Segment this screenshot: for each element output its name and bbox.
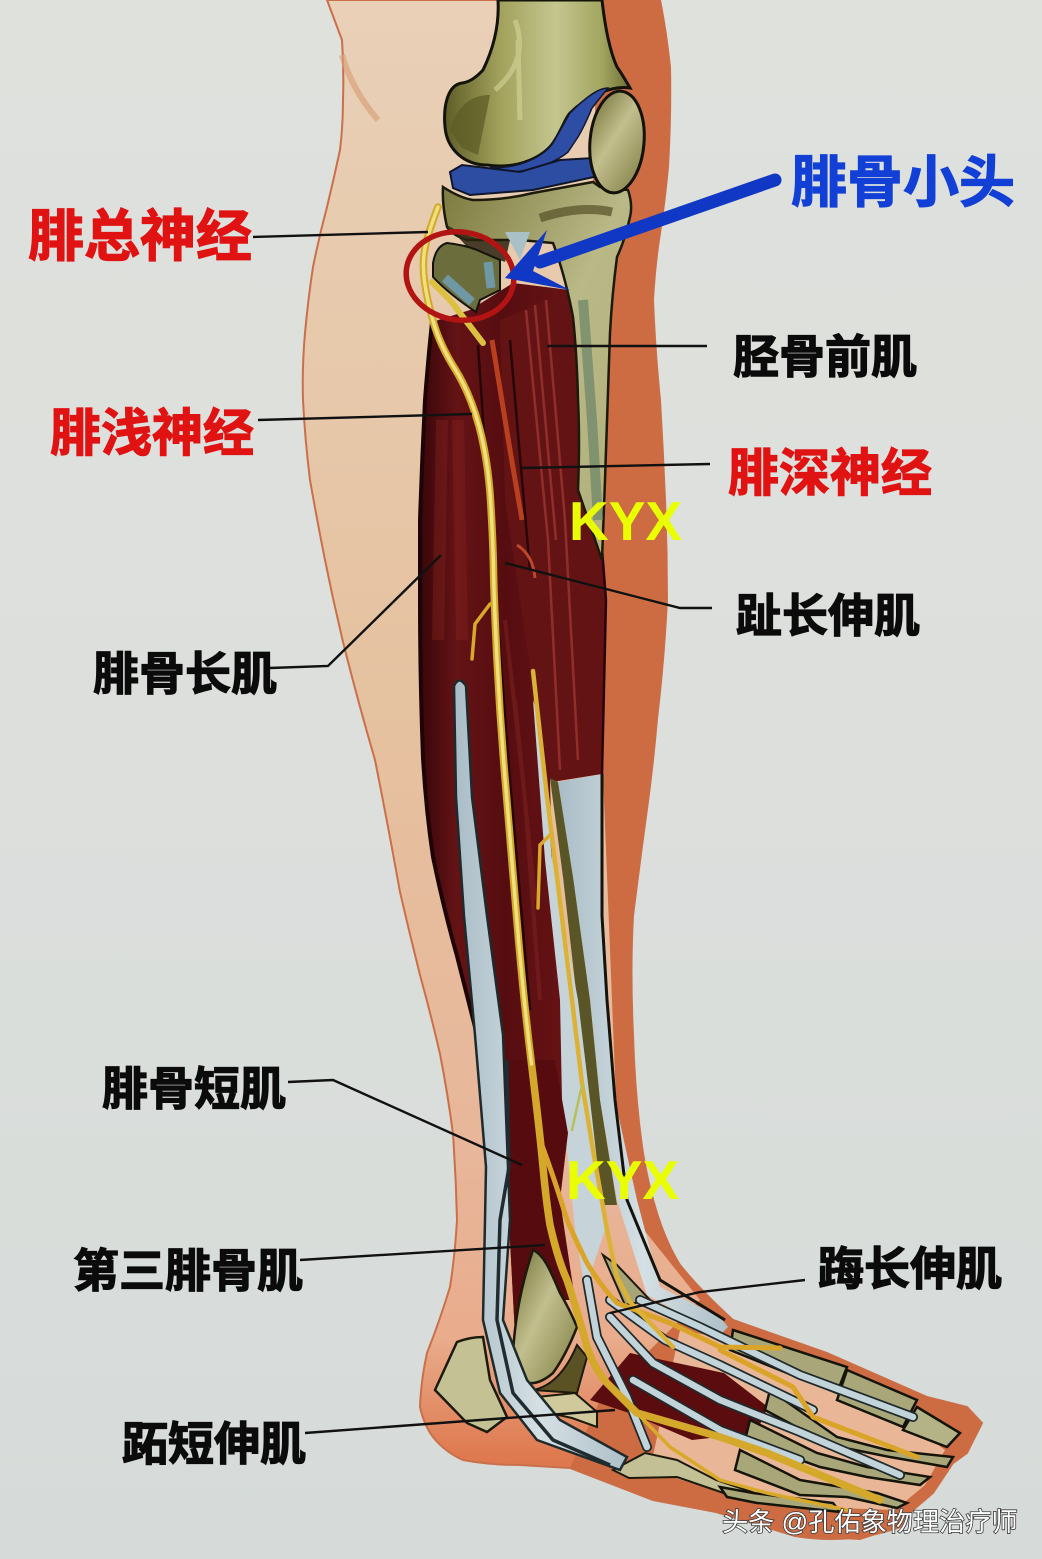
label: deep peroneal nerve: 腓深神经 <box>728 445 932 502</box>
superficial peroneal nerve <box>423 207 880 1500</box>
peroneal tendons <box>454 680 627 1470</box>
small green-yellow twig <box>572 1085 582 1130</box>
label: head of fibula: 腓骨小头 <box>791 151 1015 214</box>
foot muscle: extensor brevis <box>590 1353 768 1440</box>
calcaneus bone <box>435 1337 507 1432</box>
tibia shaft and head <box>443 182 631 560</box>
fibular head <box>433 243 500 312</box>
blue femoral cartilage <box>490 88 608 172</box>
source credit: 头条 @孔佑象物理治疗师 <box>722 1507 1018 1537</box>
muscle: peroneus and extensors <box>420 283 606 1335</box>
foot: metatarsals and toes <box>720 1330 960 1512</box>
patella <box>586 89 648 195</box>
common peroneal branch <box>432 282 483 343</box>
superficial nerve highlight <box>423 207 532 1064</box>
fibular head highlight <box>445 262 491 302</box>
lower tibia <box>513 1250 577 1383</box>
femur shading <box>450 20 520 155</box>
leader lines <box>253 232 805 1433</box>
label: extensor hallucis longus: 踇长伸肌 <box>818 1243 1002 1295</box>
label: tibialis anterior: 胫骨前肌 <box>733 331 917 383</box>
label: peroneus brevis: 腓骨短肌 <box>102 1063 286 1115</box>
red ring around fibular head <box>400 225 520 327</box>
label: peroneus tertius: 第三腓骨肌 <box>73 1245 303 1297</box>
medial dorsal nerve <box>540 1140 917 1457</box>
deep peroneal nerve <box>533 671 673 1347</box>
tarsal bones <box>533 1255 755 1500</box>
watermark KYX lower: KYX <box>566 1149 679 1211</box>
label: extensor digitorum brevis: 跖短伸肌 <box>122 1418 306 1470</box>
leg skin silhouette <box>303 0 982 1540</box>
label: superficial peroneal nerve: 腓浅神经 <box>50 405 254 462</box>
watermark KYX upper: KYX <box>569 490 682 552</box>
blue meniscus <box>450 158 594 195</box>
tibialis anterior lower tendon and shaft <box>533 700 728 1335</box>
foot interior skin <box>650 1330 945 1510</box>
femur <box>445 0 630 166</box>
label: peroneus longus: 腓骨长肌 <box>93 648 277 700</box>
extensor tendons on foot <box>587 1280 913 1475</box>
label: common peroneal nerve: 腓总神经 <box>28 205 252 268</box>
blue arrow <box>505 180 775 290</box>
label: extensor digitorum longus: 趾长伸肌 <box>736 590 920 642</box>
lower muscle strip <box>503 1060 575 1335</box>
nerves <box>423 207 917 1510</box>
lateral branches <box>472 604 847 1510</box>
